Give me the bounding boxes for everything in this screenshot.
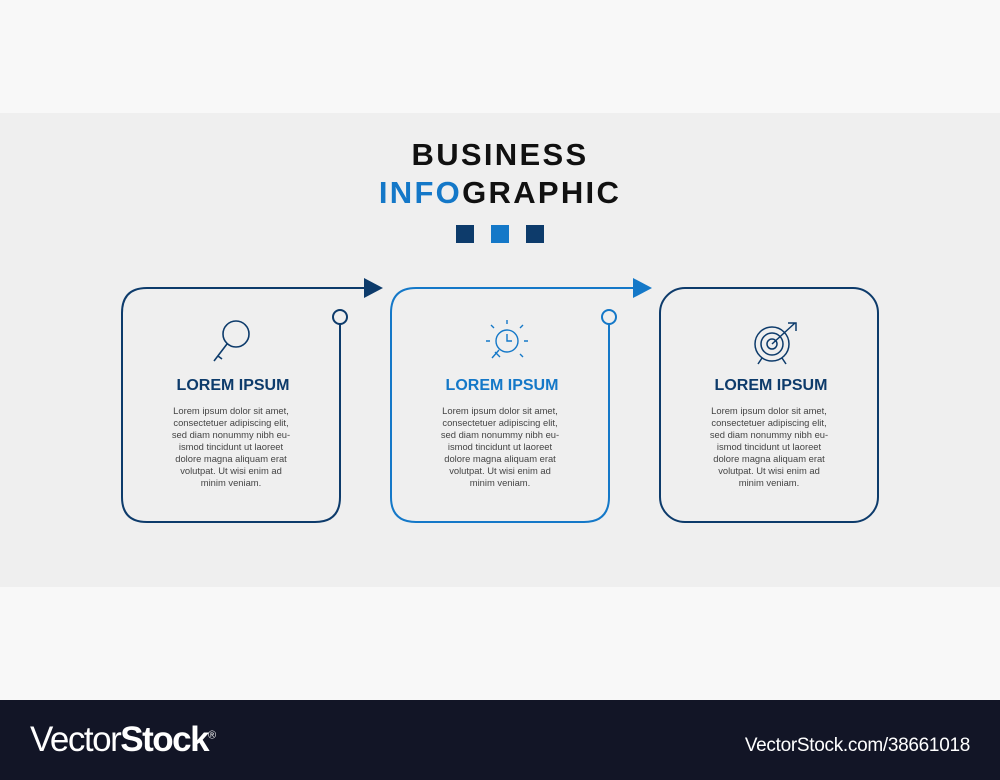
title: INFOGRAPHIC xyxy=(379,175,621,210)
text: dolore magna aliquam erat xyxy=(713,453,825,464)
text: ismod tincidunt ut laoreet xyxy=(448,441,552,452)
text: minim veniam. xyxy=(739,477,799,488)
title xyxy=(379,137,621,210)
footer: VectorStock.com/38661018 xyxy=(745,735,970,756)
squares xyxy=(456,225,544,243)
text: sed diam nonummy nibh eu- xyxy=(441,429,559,440)
text: dolore magna aliquam erat xyxy=(444,453,556,464)
text: ismod tincidunt ut laoreet xyxy=(179,441,283,452)
text: ismod tincidunt ut laoreet xyxy=(717,441,821,452)
text: consectetuer adipiscing elit, xyxy=(173,417,289,428)
footer xyxy=(0,700,1000,780)
icon: target xyxy=(755,323,796,364)
text: sed diam nonummy nibh eu- xyxy=(172,429,290,440)
text: volutpat. Ut wisi enim ad xyxy=(718,465,820,476)
card 3 text: LOREM IPSUM xyxy=(715,377,827,394)
card 3 outline xyxy=(660,288,878,522)
footer: VectorStock® xyxy=(30,720,215,759)
text: minim veniam. xyxy=(201,477,261,488)
text: Lorem ipsum dolor sit amet, xyxy=(711,405,827,416)
text: consectetuer adipiscing elit, xyxy=(442,417,558,428)
text: Lorem ipsum dolor sit amet, xyxy=(442,405,558,416)
text: sed diam nonummy nibh eu- xyxy=(710,429,828,440)
text: minim veniam. xyxy=(470,477,530,488)
icon: magnifier xyxy=(214,321,249,361)
title: BUSINESS xyxy=(412,137,588,172)
text: volutpat. Ut wisi enim ad xyxy=(449,465,551,476)
text: consectetuer adipiscing elit, xyxy=(711,417,827,428)
card 2 outline xyxy=(391,278,652,522)
card 2 text: LOREM IPSUM xyxy=(446,377,558,394)
icon: bulb xyxy=(486,320,528,358)
card 1 outline xyxy=(122,278,383,522)
text: dolore magna aliquam erat xyxy=(175,453,287,464)
text: Lorem ipsum dolor sit amet, xyxy=(173,405,289,416)
text: volutpat. Ut wisi enim ad xyxy=(180,465,282,476)
card 1 text: LOREM IPSUM xyxy=(177,377,289,394)
